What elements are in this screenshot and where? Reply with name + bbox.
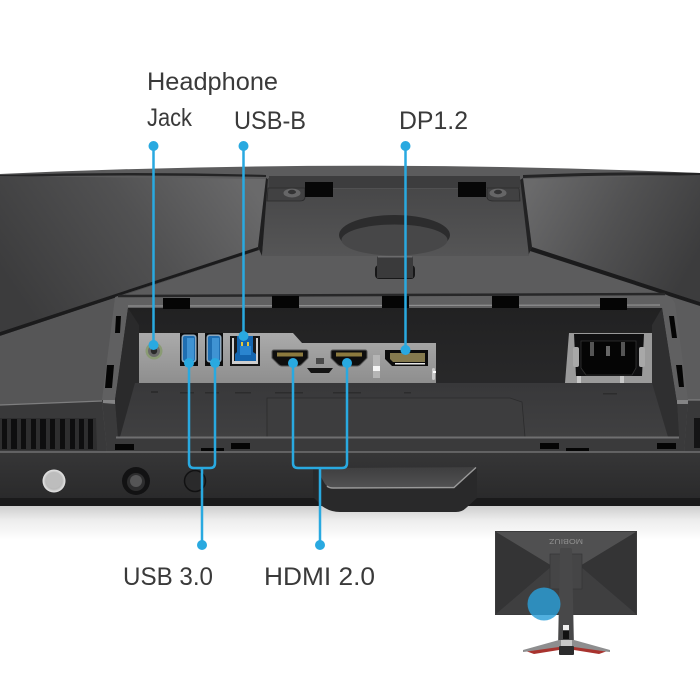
- display port: [385, 350, 428, 366]
- lower left shell: [0, 250, 259, 405]
- mount slot left: [305, 182, 333, 197]
- right back panel: [523, 175, 700, 302]
- hdmi port 2: [331, 350, 367, 366]
- floor shadow: [0, 503, 700, 540]
- bay top highlight: [128, 305, 660, 306]
- headphone jack: [146, 342, 162, 360]
- bottom control strip: [0, 452, 700, 506]
- button: power: [184, 470, 206, 492]
- label: USB 3.0: USB 3.0: [123, 563, 213, 591]
- hdmi port 1: [272, 350, 308, 366]
- bracket: HDMI 2.0: [293, 363, 347, 545]
- usb 3.0 port 1: [180, 333, 198, 366]
- monitor rear body: [0, 166, 700, 505]
- thumbnail stand: [558, 548, 574, 648]
- line: USB-B: [242, 146, 245, 336]
- bay rim: [102, 294, 688, 400]
- cable clip: [375, 256, 415, 279]
- label: DP1.2: DP1.2: [399, 107, 468, 135]
- port plate: [139, 333, 617, 394]
- left side vent: [0, 401, 107, 452]
- light indicator: [373, 355, 380, 378]
- callout dots: [148, 141, 410, 550]
- label: Headphone Jack: Jack: [147, 104, 192, 132]
- line: headphone jack: [152, 146, 155, 345]
- thumbnail logo: MOBIUZ: [548, 537, 583, 544]
- screw left: [284, 188, 300, 198]
- label: USB-B: USB-B: [234, 107, 306, 135]
- bracket: USB 3.0: [189, 363, 215, 545]
- label: Headphone Jack: Headphone: [147, 68, 278, 96]
- power socket: [565, 333, 652, 383]
- thumbnail: monitor rear view: [495, 531, 637, 655]
- stand mount recess: [262, 176, 529, 279]
- left back panel: [0, 176, 266, 332]
- line: DP1.2: [404, 146, 407, 350]
- mount slot right: [458, 182, 486, 197]
- bay interior: [115, 308, 679, 437]
- bay clips: [105, 296, 684, 451]
- callout lines: [154, 146, 406, 545]
- bay side walls: [115, 308, 139, 437]
- button: joystick: [122, 467, 150, 495]
- usb 3.0 port 2: [205, 333, 223, 366]
- screw right: [490, 188, 506, 198]
- mounting hole: [339, 215, 450, 256]
- bay floor: [120, 383, 668, 437]
- usb-b port: [230, 336, 260, 366]
- port microlabels: [151, 391, 617, 394]
- right side vent: [684, 400, 700, 452]
- bay lip: [116, 437, 680, 452]
- power-led and card slot: [307, 358, 333, 373]
- port bay: [0, 294, 700, 453]
- thumbnail screen: [495, 531, 637, 615]
- thumbnail highlight circle: [528, 588, 560, 620]
- label: Headphone Jack: [147, 68, 278, 132]
- button: silver key: [42, 470, 66, 492]
- stand handle: [313, 467, 477, 512]
- label: HDMI 2.0: HDMI 2.0: [264, 563, 375, 591]
